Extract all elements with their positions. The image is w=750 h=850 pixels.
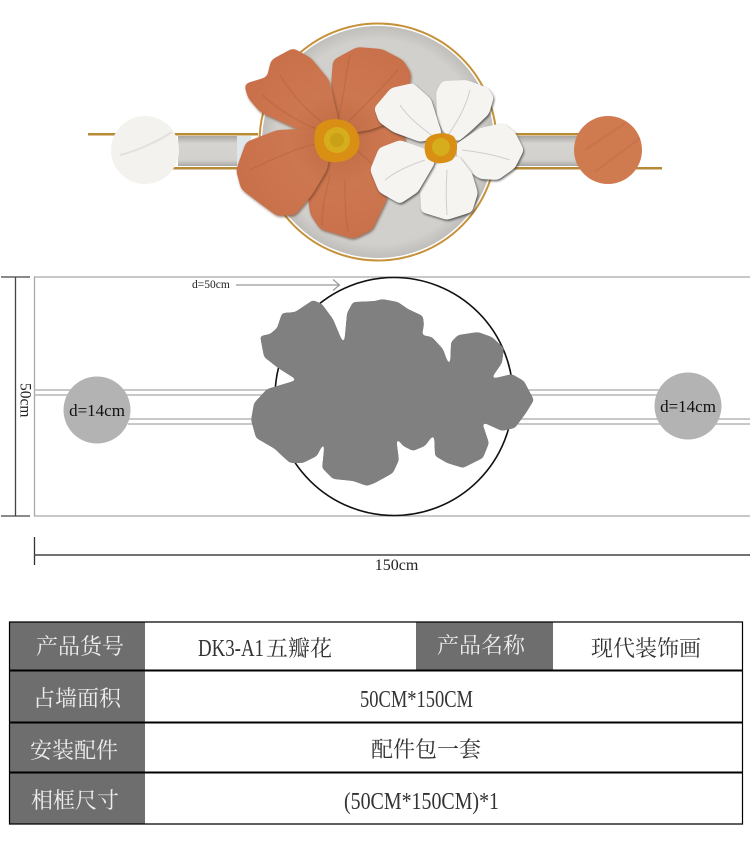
bottom orange petal <box>308 145 388 239</box>
value: product code <box>198 632 332 663</box>
outer frame <box>34 277 750 516</box>
right white petal <box>456 123 524 180</box>
label cells <box>10 622 553 824</box>
left white petal <box>370 140 435 204</box>
right small circle <box>654 372 722 440</box>
white flower <box>370 80 524 220</box>
label: accessories: 安装配件 <box>30 734 118 765</box>
orange petal veins <box>250 55 398 232</box>
50cm diameter circle <box>275 278 513 516</box>
product specification table <box>10 622 742 824</box>
left height dimension: 50cm <box>16 383 34 417</box>
product photo: flower wall art <box>88 24 662 260</box>
value: product name: 现代装饰画 <box>591 632 701 663</box>
right rail <box>510 133 662 170</box>
dimension diagram <box>1 277 750 574</box>
value: accessories: 配件包一套 <box>371 733 481 764</box>
left rail <box>88 133 258 170</box>
orange flower <box>236 47 411 239</box>
left small circle: d=14cm <box>69 401 125 420</box>
value: product code: 五瓣花 <box>266 632 332 663</box>
top left rails <box>34 390 270 395</box>
flower silhouette <box>251 299 534 486</box>
upper-left white petal <box>374 83 442 142</box>
orange flower gold centre <box>314 119 360 162</box>
right rails lower <box>518 419 750 424</box>
lower-left orange petal <box>236 128 332 216</box>
small white circle <box>111 116 179 184</box>
right small circle: d=14cm <box>660 397 716 416</box>
d=50cm arrow <box>236 280 340 290</box>
top orange petal <box>331 47 411 134</box>
white petal veins <box>385 90 510 215</box>
value: wall area: 50CM*150CM <box>360 687 473 713</box>
top-right white petal <box>436 80 494 142</box>
upper-left orange petal <box>244 48 339 134</box>
bottom white petal <box>420 155 478 220</box>
value: frame size: (50CM*150CM)*1 <box>344 789 499 815</box>
value: product code: DK3-A1 <box>198 636 264 662</box>
large round disc with gold ring <box>260 24 496 260</box>
label: frame size: 相框尺寸 <box>31 784 119 815</box>
left height dimension <box>1 277 34 516</box>
label: wall area: 占墙面积 <box>33 682 122 713</box>
white flower gold centre <box>425 133 457 163</box>
lower left rails <box>128 419 256 424</box>
left small circle <box>64 376 130 444</box>
label: product code: 产品货号 <box>36 630 124 661</box>
table lines <box>10 622 742 824</box>
right rails upper <box>525 390 665 395</box>
d=50cm label: d=50cm <box>192 279 230 291</box>
small orange circle <box>574 116 642 184</box>
width dimension: 150cm <box>375 557 419 574</box>
label: product name: 产品名称 <box>437 629 526 660</box>
right orange petal <box>345 105 405 195</box>
